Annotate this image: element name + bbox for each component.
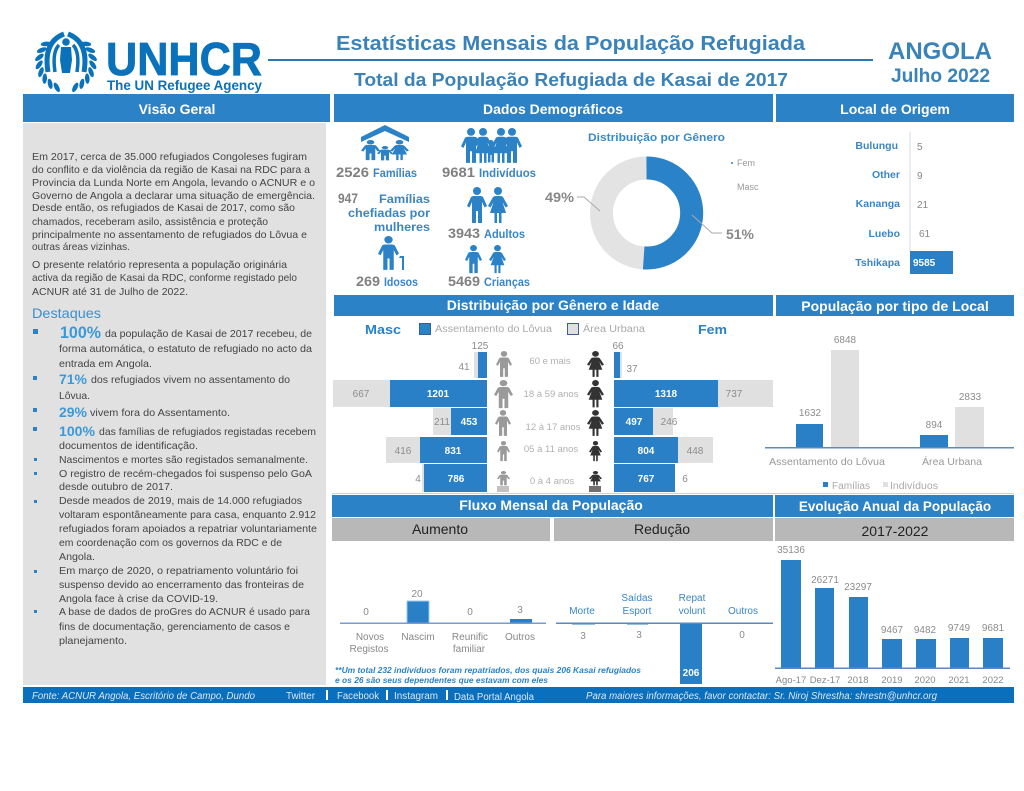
chart: location bars: Área Urbana [922,455,982,468]
chart: gender donut: Fem [737,158,755,168]
text block: highlights: A base de dados de proGres do ACNUR é usado para [59,607,310,618]
chart: origin bars [855,132,953,274]
chart: increase: Novos [356,632,384,643]
heading: annual evolution: Evolução Anual da População [799,499,991,514]
chart: decrease: Outros [728,606,758,617]
title: Estatísticas Mensais da População Refugiada [336,33,806,55]
stat: individuals: 9681 [442,164,475,180]
chart: population pyramid: 786 [448,474,465,485]
chart: origin bars: Luebo [868,228,900,240]
subheading: aumento [332,518,550,541]
chart: location bars: 1632 [799,408,822,419]
chart title: Distribuição por Gênero [588,132,725,144]
chart: population pyramid: 667 [353,389,370,400]
text block: highlights: 100% [60,323,101,342]
chart: origin bars: Tshikapa [855,257,900,269]
text block: overview: Governo de Angola a declarar uma situação de emergência. [32,191,315,202]
text block: overview: Provincia da Lunda Norte em Angola, levando o ACNUR e o [32,178,315,189]
chart: population pyramid: 6 [682,474,688,485]
icon: elderly [378,236,404,270]
chart: annual population: 9467 [881,625,904,636]
stat: adults: Adultos [484,229,525,241]
stat: individuals [442,164,536,180]
heading: visão geral [23,94,330,122]
text block: highlights: desde outubro de 2017. [59,482,173,493]
chart: annual population: 9482 [914,625,937,636]
text block: highlights: da população de Kasai de 2017 recebeu, de [105,329,312,340]
chart: population pyramid: 246 [661,417,678,428]
heading: destaques: Destaques [32,305,101,321]
footnote [335,666,642,685]
text block: highlights: vivem fora do Assentamento. [90,408,230,419]
subheading: redução: Redução [634,521,690,537]
chart: population pyramid: 0 à 4 anos [530,476,574,487]
chart: decrease [556,593,773,684]
text block: highlights: dos refugiados vivem no assentamento do [91,375,290,386]
chart: population pyramid: 05 à 11 anos [524,444,578,455]
text block: highlights: entrada em Angola. [59,359,152,370]
text block: overview: O presente relatório representa a população originária [32,260,287,271]
chart: population pyramid: 125 [472,341,489,352]
panel background [23,123,326,685]
chart: population pyramid: 453 [461,417,478,428]
subheading: aumento: Aumento [412,521,468,537]
panel: população por tipo de local [765,295,1014,492]
panel: distribuição por gênero e idade [333,295,773,492]
text block: highlights: Desde meados de 2019, mais de 14.000 refugiados [59,496,302,507]
text block: highlights: refugiados foram apoiados a repatriar voluntariamente [59,524,317,535]
text block: overview: do conflito e da violência da região de Kasai na RDC para a [32,165,310,176]
subheading: redução [554,518,773,541]
chart: annual population: Ago-17 [776,675,806,686]
chart: population pyramid: 60 e mais [529,356,571,367]
chart: location bars: 6848 [834,335,857,346]
chart: gender donut [545,132,759,258]
stat: adults [448,225,525,241]
text block: highlights: O registro de recém-chegados foi suspenso pelo GoA [59,469,312,480]
stat: individuals: Indivíduos [479,168,536,180]
chart: population pyramid: 18 à 59 anos [524,389,579,400]
logo wordmark: UNHCR [106,33,262,85]
text block: overview: outras áreas vizinhas. [32,242,130,253]
chart: increase [340,589,546,655]
chart: population pyramid: 211 [434,417,450,428]
chart: increase: 3 [517,605,523,616]
text block: highlights: voltaram espontâneamente para casa, enquanto 2.912 [59,510,316,521]
text block: overview: ACNUR até 31 de Julho de 2022. [32,287,188,298]
chart: population pyramid: 41 [458,362,470,373]
heading: dados demográficos [334,94,773,122]
chart: annual population: 2022 [982,675,1004,686]
chart: population pyramid: 37 [626,364,638,375]
chart: population pyramid: 737 [726,389,743,400]
chart: decrease: Esport [623,606,652,617]
chart: annual population: 2021 [948,675,970,686]
legend: gender and location [365,322,727,337]
stat: children [448,273,530,289]
legend: location bars [823,481,938,492]
stat: female-headed families: 947 [338,190,358,206]
legend: gender and location: Fem [698,322,727,337]
chart: population pyramid: 4 [415,474,421,485]
footer: Data Portal Angola [454,692,534,703]
chart: origin bars: 9585 [913,258,936,269]
chart: increase: familiar [453,644,486,655]
stat: families: 2526 [336,164,369,180]
text block: highlights: Em março de 2020, o repatriamento voluntário foi [59,566,298,577]
chart: increase: 0 [467,607,473,618]
stat: families [336,164,417,180]
text block: highlights: forma automática, o estatuto de refugiado no acto da [59,344,312,355]
chart: decrease: 206 [683,668,700,679]
legend: gender and location: Assentamento do Lôvua [435,324,552,335]
text block: highlights: 29% [59,405,87,420]
chart: population pyramid: 448 [687,446,704,457]
footer: Para maiores informações, favor contactar: Sr. Niroj Shrestha: shrestn@unhcr.org [586,691,937,702]
legend: location bars: Famílias [832,481,870,492]
chart: annual population: 26271 [811,575,839,586]
chart: decrease: 3 [580,631,586,642]
chart: gender donut: 49% [545,190,574,205]
text block: highlights: 71% [59,372,87,387]
subheading: years [775,518,1014,541]
chart: decrease: volunt [679,606,706,617]
subtitle: Total da População Refugiada de Kasai de 2017 [354,69,788,90]
chart: gender donut: 51% [726,227,754,242]
chart: annual population: 2020 [914,675,936,686]
chart: increase: Nascim [401,632,435,643]
chart: annual population [775,545,1010,686]
panel: fluxo mensal da população [332,495,773,685]
chart: origin bars: 5 [917,142,923,153]
text block: highlights: Nascimentos e mortes são registados semanalmente. [59,455,308,466]
chart: location bars [765,335,1014,468]
chart: annual population: 2018 [847,675,869,686]
panel: visão geral [23,94,330,685]
stat: female-headed families: Famílias [379,194,430,206]
header rule [268,59,873,61]
chart: origin bars: 9 [917,171,923,182]
stat: elderly: Idosos [384,277,418,289]
stat: female-headed families: chefiadas por [348,208,431,220]
text block: highlights: suspenso devido ao encerramento das fronteiras de [59,580,304,591]
panel: local de origem [776,94,1014,274]
date: Julho 2022 [891,66,990,87]
heading: visão geral: Visão Geral [139,101,215,117]
text block: overview: activa da região de Kasai da RDC, conforme registado pelo [32,273,297,284]
panel: evolução anual [775,495,1014,686]
text block: highlights: Angola. [59,552,95,563]
chart: population pyramid: 416 [395,446,412,457]
chart: location bars: 2833 [959,392,982,403]
chart: population pyramid [333,341,773,492]
chart: decrease: Repat [679,593,706,604]
text block: highlights: em coordenação com os governos da RDC e de [59,538,282,549]
text block: highlights: 100% [59,424,95,439]
footer: Twitter [286,691,316,702]
chart: origin bars: Kananga [856,198,900,210]
text block: highlights: planejamento. [59,636,127,647]
heading: population by location: População por tipo de Local [801,298,989,314]
heading: gender and age: Distribuição por Gênero e Idade [447,297,659,313]
chart: increase: 0 [363,607,369,618]
heading: gender and age [334,295,773,316]
chart: annual population: 9681 [982,623,1005,634]
chart: annual population: Dez-17 [810,675,840,686]
stat: children: 5469 [448,273,480,289]
footer: Fonte: ACNUR Angola, Escritório de Campo, Dundo [32,691,255,702]
chart: decrease: Saídas [621,593,653,604]
stat: families: Famílias [373,168,417,180]
text block: overview: principalmente no assentamento de refugiados do Lôvua e [32,230,307,241]
footer: Facebook [337,691,380,702]
chart: increase: Registos [350,644,388,655]
heading: local de origem [776,94,1014,122]
legend: gender and location: Masc [365,322,401,337]
chart: population pyramid: 831 [445,446,462,457]
text block: highlights [33,323,317,647]
chart: origin bars: 61 [919,229,931,240]
icons: male age groups [494,351,513,492]
heading: annual evolution [775,495,1014,517]
heading: monthly flow: Fluxo Mensal da População [459,497,643,513]
text block: highlights: Lôvua. [59,391,90,402]
logo: UNHCR [34,33,262,93]
stat: elderly [356,273,418,289]
chart: origin bars: 21 [917,200,929,211]
footnote: **Um total 232 indivíduos foram repatriados, dos quais 206 Kasai refugiados [335,666,642,675]
icon: children [465,245,506,273]
chart: annual population: 2019 [881,675,903,686]
text block: highlights: das famílias de refugiados registadas recebem [99,427,316,438]
chart: location bars: Assentamento do Lôvua [769,456,885,468]
subheading: years: 2017-2022 [862,523,929,539]
stat: elderly: 269 [356,273,380,289]
chart: annual population: 23297 [844,582,872,593]
heading: local de origem: Local de Origem [840,101,950,117]
heading: monthly flow [332,495,773,517]
chart: decrease: 3 [636,630,642,641]
heading: population by location [776,295,1014,316]
text block: overview: Desde então, os refugiados de Kasai de 2017, como são [32,203,295,214]
stat: adults: 3943 [448,225,480,241]
stat: children: Crianças [484,277,530,289]
chart: origin bars: Other [872,169,900,181]
text block: overview [32,152,315,298]
icon: wreath and sheltering hands [34,34,98,93]
text block: overview: Em 2017, cerca de 35.000 refugiados Congoleses fugiram [32,152,307,163]
chart: decrease: 0 [739,630,745,641]
chart: population pyramid: 1201 [427,389,450,400]
chart: population pyramid: 1318 [655,389,678,400]
icon: families [361,125,409,160]
chart: population pyramid: 66 [612,341,624,352]
legend: location bars: Indivíduos [890,481,938,492]
chart: increase: Outros [505,632,535,643]
chart: population pyramid: 497 [626,417,643,428]
icon: individuals [461,128,522,163]
text block: overview: chamados, receberam asilo, assistência e proteção [32,217,268,228]
stat: female-headed families: mulheres [374,222,430,234]
chart: annual population: 35136 [777,545,805,556]
heading: dados demográficos: Dados Demográficos [483,101,623,117]
chart: annual population: 9749 [948,623,971,634]
footer [23,687,1014,703]
country: ANGOLA [888,38,992,65]
logo tagline: The UN Refugee Agency [107,77,262,93]
chart: population pyramid: 767 [638,474,655,485]
chart: population pyramid: 12 à 17 anos [526,422,581,433]
stat: female-headed families [338,190,431,234]
chart: population pyramid: 804 [638,446,655,457]
legend: gender and location: Área Urbana [583,322,645,335]
chart: decrease: Morte [569,606,595,617]
chart: gender donut: Masc [737,182,759,192]
text block: highlights: documentos de identificação. [59,441,198,452]
icons: female age groups [587,351,604,492]
panel: dados demográficos [334,94,773,289]
icon: adults [467,187,508,223]
text block: highlights: fins de documentação, gerenciamento de casos e [59,622,290,633]
chart: increase: Reunific [452,632,488,643]
text block: highlights: Angola face à crise da COVID-19. [59,594,218,605]
chart: location bars: 894 [926,420,943,431]
footer: Instagram [394,691,438,702]
chart: origin bars: Bulungu [855,140,898,152]
footnote: e os 26 são seus dependentes que estavam com eles [335,676,549,685]
chart: increase: 20 [411,589,423,600]
